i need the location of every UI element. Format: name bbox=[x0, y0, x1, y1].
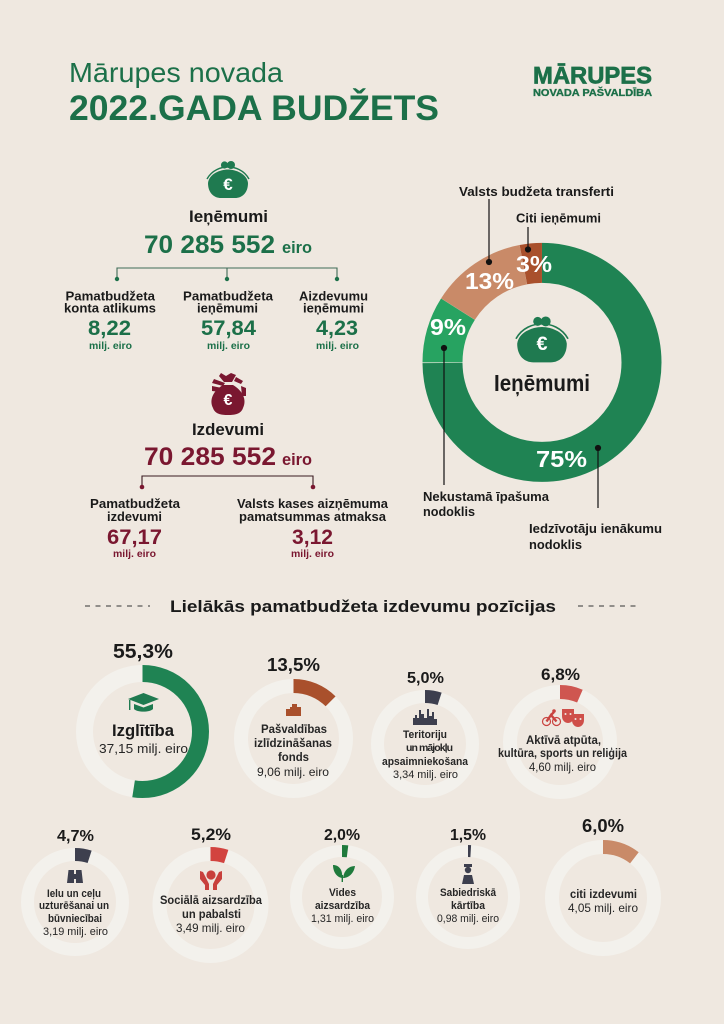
expenditure item: treasury loan repayment: pamatsummas atmaksa bbox=[239, 510, 387, 524]
revenue item: account balance: konta atlikums bbox=[64, 302, 156, 316]
panel: recreation, culture, sport and religion: Aktīvā atpūta, bbox=[526, 733, 601, 747]
revenue item: base budget revenue: ieņēmumi bbox=[197, 302, 258, 316]
revenue item: account balance: Pamatbudžeta bbox=[66, 290, 156, 304]
icon: donut purse: € bbox=[536, 333, 548, 355]
panel: education: 37,15 milj. eiro bbox=[99, 742, 188, 756]
revenue total: eiro bbox=[282, 239, 312, 257]
panel: social protection and benefits bbox=[160, 825, 262, 956]
expenditure item: base budget bbox=[90, 497, 181, 560]
revenue item: base budget revenue: Pamatbudžeta bbox=[183, 290, 274, 304]
icon: donut purse bbox=[516, 316, 568, 362]
revenue item: loan revenue: 4,23 bbox=[316, 317, 358, 340]
panel: expenditure summary bbox=[90, 373, 389, 560]
expenditure item: base budget: milj. eiro bbox=[113, 549, 156, 560]
icon: theatre masks bbox=[562, 709, 584, 727]
revenue item: base budget revenue: milj. eiro bbox=[207, 341, 250, 352]
panel: road maintenance and construction bbox=[28, 828, 122, 950]
panel: social protection and benefits: 3,49 milj. eiro bbox=[176, 921, 245, 935]
connector: revenue bbox=[115, 268, 339, 281]
callout: other revenue: Citi ieņēmumi bbox=[516, 212, 601, 226]
panel: environmental protection: 2,0% bbox=[324, 827, 360, 844]
panel: education: Izglītība bbox=[112, 721, 175, 740]
icon: binoculars bbox=[67, 870, 83, 883]
revenue item: account balance bbox=[64, 290, 156, 352]
donut percent labels bbox=[430, 251, 587, 472]
panel: recreation, culture, sport and religion bbox=[498, 665, 627, 792]
title: 2022.GADA BUDŽETS bbox=[69, 88, 439, 128]
callout: other revenue bbox=[516, 212, 601, 253]
callout: property tax: nodoklis bbox=[423, 505, 475, 519]
expenditure item: treasury loan repayment: milj. eiro bbox=[291, 549, 334, 560]
panel: revenue summary bbox=[64, 161, 368, 352]
revenue total: 70 285 552 bbox=[144, 231, 275, 259]
panel: territory and housing: un mājokļu bbox=[406, 742, 453, 754]
section heading: Lielākās pamatbudžeta izdevumu pozīcijas bbox=[170, 598, 556, 616]
panel: other expenditure bbox=[552, 816, 654, 949]
expenditure total: eiro bbox=[282, 451, 312, 469]
panel: public order bbox=[422, 827, 514, 943]
callout: state budget transfers bbox=[459, 185, 614, 265]
expenditure item: treasury loan repayment bbox=[237, 497, 389, 560]
icon: money bag: € bbox=[224, 392, 233, 409]
panel: territory and housing: apsaimniekošana bbox=[382, 756, 469, 768]
panel: social protection and benefits: Sociālā aizsardzība bbox=[160, 893, 262, 907]
panel: environmental protection: 1,31 milj. eiro bbox=[311, 913, 374, 925]
callout: state budget transfers: Valsts budžeta transferti bbox=[459, 185, 614, 199]
panel: other expenditure: 6,0% bbox=[582, 816, 624, 836]
icon: money bag bbox=[211, 373, 246, 415]
expenditure item: treasury loan repayment: Valsts kases aizņēmuma bbox=[237, 497, 389, 511]
title: Mārupes novada bbox=[69, 57, 283, 88]
panel: recreation, culture, sport and religion: kultūra, sports un reliģija bbox=[498, 746, 627, 760]
callout: property tax bbox=[423, 345, 550, 519]
panel: social protection and benefits: 5,2% bbox=[191, 825, 231, 844]
chart: revenue donut bbox=[405, 225, 679, 500]
expenditure item: treasury loan repayment: 3,12 bbox=[292, 526, 333, 549]
revenue item: account balance: 8,22 bbox=[88, 317, 131, 340]
panel: other expenditure: citi izdevumi bbox=[570, 887, 637, 901]
panel: social protection and benefits: un pabalsti bbox=[182, 907, 241, 921]
revenue item: loan revenue bbox=[299, 290, 368, 352]
panel: recreation, culture, sport and religion: 4,60 milj. eiro bbox=[529, 760, 596, 774]
expenditure item: base budget: 67,17 bbox=[107, 526, 162, 549]
panel: environmental protection: aizsardzība bbox=[315, 900, 371, 912]
icon: person in hands bbox=[200, 870, 222, 890]
icon: purse: € bbox=[223, 175, 233, 194]
revenue item: base budget revenue: 57,84 bbox=[201, 317, 256, 340]
callout: personal income tax: Iedzīvotāju ienākumu bbox=[529, 522, 662, 536]
panel: municipal equalisation fund: 9,06 milj. eiro bbox=[257, 765, 329, 779]
panel: education: 55,3% bbox=[113, 641, 173, 663]
panel: territory and housing bbox=[378, 670, 472, 792]
revenue item: base budget revenue bbox=[183, 290, 274, 352]
revenue item: loan revenue: milj. eiro bbox=[316, 341, 359, 352]
panel: municipal equalisation fund bbox=[241, 655, 346, 791]
icon: police officer bbox=[462, 864, 474, 884]
donut percent labels: 13% bbox=[465, 268, 514, 294]
callout: personal income tax bbox=[529, 445, 662, 552]
panel: public order: 1,5% bbox=[450, 827, 486, 844]
logo: MĀRUPES bbox=[533, 62, 652, 90]
panel: environmental protection bbox=[296, 827, 388, 943]
panel: municipal equalisation fund: 13,5% bbox=[267, 655, 320, 675]
panel: municipal equalisation fund: izlīdzināšanas bbox=[254, 736, 332, 750]
icon: sprout bbox=[333, 865, 355, 882]
panel: road maintenance and construction: būvniecībai bbox=[48, 913, 102, 925]
panel: recreation, culture, sport and religion: 6,8% bbox=[541, 665, 580, 684]
callout: property tax: Nekustamā īpašuma bbox=[423, 490, 550, 504]
panel: road maintenance and construction: 3,19 milj. eiro bbox=[43, 926, 108, 938]
panel: territory and housing: 3,34 milj. eiro bbox=[393, 769, 458, 781]
panel: road maintenance and construction: Ielu un ceļu bbox=[47, 888, 101, 900]
icon: cyclist bbox=[542, 709, 560, 726]
connector: expenditure bbox=[140, 476, 315, 489]
panel: public order: 0,98 milj. eiro bbox=[437, 913, 499, 925]
donut percent labels: 3% bbox=[516, 251, 552, 277]
panel: road maintenance and construction: 4,7% bbox=[57, 828, 94, 845]
expenditure total: 70 285 552 bbox=[144, 443, 276, 471]
panel: public order: kārtība bbox=[451, 900, 486, 912]
panel: municipal equalisation fund: fonds bbox=[278, 750, 309, 764]
panel: territory and housing: 5,0% bbox=[407, 670, 444, 687]
expenditure item: base budget: izdevumi bbox=[107, 510, 162, 524]
revenue item: loan revenue: Aizdevumu bbox=[299, 290, 368, 304]
panel: education bbox=[84, 641, 200, 790]
icon: city skyline bbox=[413, 709, 437, 725]
panel: public order: Sabiedriskā bbox=[440, 887, 497, 899]
expenditure item: base budget: Pamatbudžeta bbox=[90, 497, 181, 511]
donut percent labels: 75% bbox=[536, 446, 587, 472]
callout: personal income tax: nodoklis bbox=[529, 538, 582, 552]
revenue item: loan revenue: ieņēmumi bbox=[303, 302, 364, 316]
donut percent labels: 9% bbox=[430, 314, 466, 340]
revenue item: account balance: milj. eiro bbox=[89, 341, 132, 352]
logo: NOVADA PAŠVALDĪBA bbox=[533, 86, 652, 99]
icon: building blocks bbox=[286, 704, 301, 716]
heading: revenue: Ieņēmumi bbox=[189, 207, 268, 226]
title bbox=[69, 57, 439, 128]
icon: graduation cap bbox=[128, 693, 159, 712]
panel: territory and housing: Teritoriju bbox=[403, 729, 447, 741]
donut centre label: Ieņēmumi bbox=[494, 370, 590, 396]
panel: road maintenance and construction: uzturēšanai un bbox=[39, 900, 109, 912]
heading: expenditure: Izdevumi bbox=[192, 420, 264, 439]
panel: other expenditure: 4,05 milj. eiro bbox=[568, 901, 638, 915]
icon: purse bbox=[207, 161, 249, 198]
panel: environmental protection: Vides bbox=[329, 887, 356, 899]
panel: municipal equalisation fund: Pašvaldības bbox=[261, 722, 327, 736]
